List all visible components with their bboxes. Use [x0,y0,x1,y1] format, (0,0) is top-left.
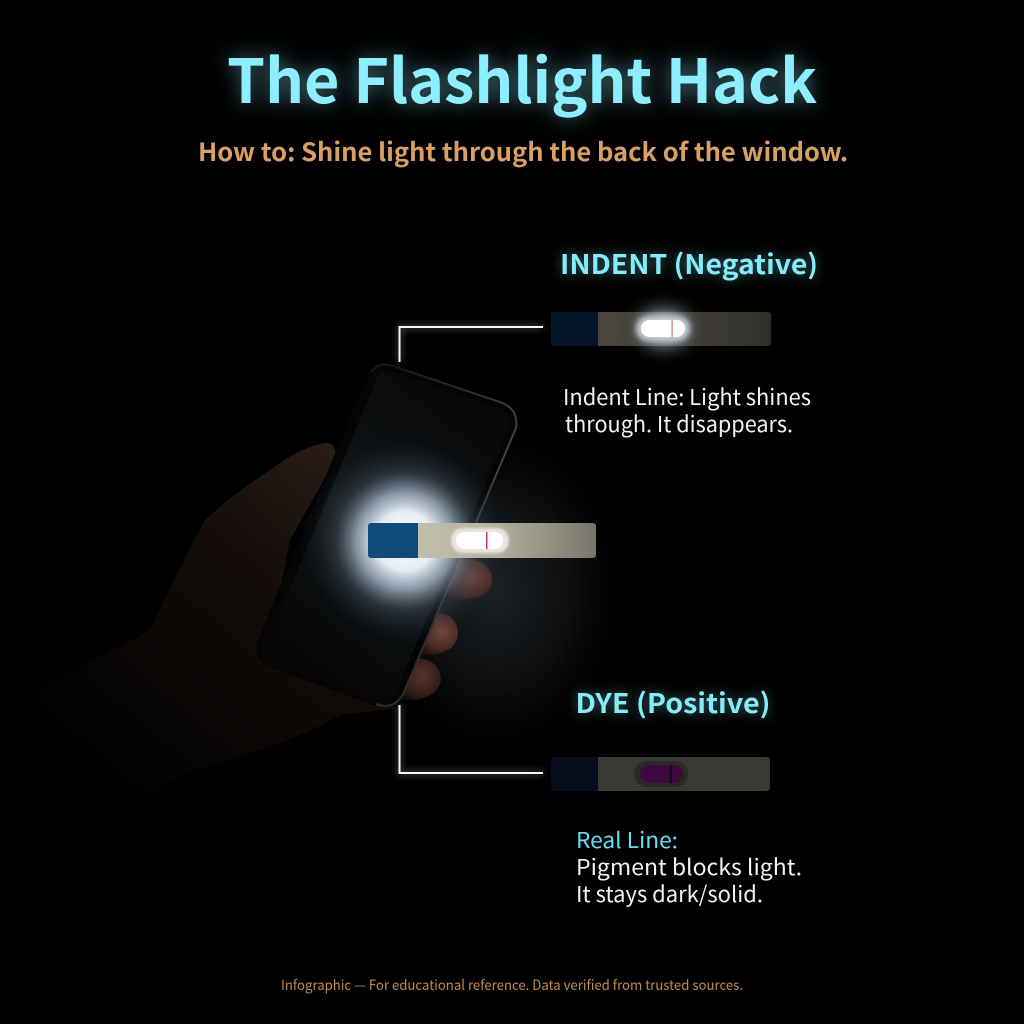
connector: top [400,327,543,362]
phone body [258,364,516,706]
text: indent explanation: Indent Line: Light shines [563,380,811,412]
heading: dye: DYE (Positive) [576,682,770,721]
dye line [670,765,672,783]
ambient light behind phone [365,425,625,755]
finger three [398,659,441,700]
text: dye explanation: It stays dark/solid. [576,877,763,909]
faint line [486,532,488,549]
text: dye explanation: Pigment blocks light. [576,850,802,882]
navy end [551,312,598,346]
phone screen [266,371,510,698]
finger one [440,558,492,602]
hand silhouette [40,443,395,815]
strip body [551,312,771,346]
text: dye explanation [576,823,802,909]
window [636,316,690,341]
positive test strip [551,757,770,791]
strip window [451,528,509,553]
flashlight glow [299,435,511,647]
title: The Flashlight Hack [227,32,817,121]
phone dark left bezel [258,372,376,704]
illustration: hand holding phone [40,364,625,815]
indent line [672,320,673,337]
text: indent explanation [563,380,811,439]
center test strip [368,523,596,558]
negative test strip [551,290,771,366]
strip body [551,757,770,791]
finger two [415,613,458,655]
footer: Infographic — For educational reference. Data verified from trusted sources. [281,975,743,995]
glow [618,290,710,366]
heading: indent: INDENT (Negative) [560,243,818,282]
strip body [368,523,596,558]
subtitle: How to: Shine light through the back of the window. [198,133,848,169]
window [634,761,688,787]
connector: bottom [400,705,543,773]
real line label: Real Line: [576,823,678,855]
text: indent explanation: through. It disappears. [565,407,793,439]
navy end [551,757,598,791]
blue end [368,523,418,558]
